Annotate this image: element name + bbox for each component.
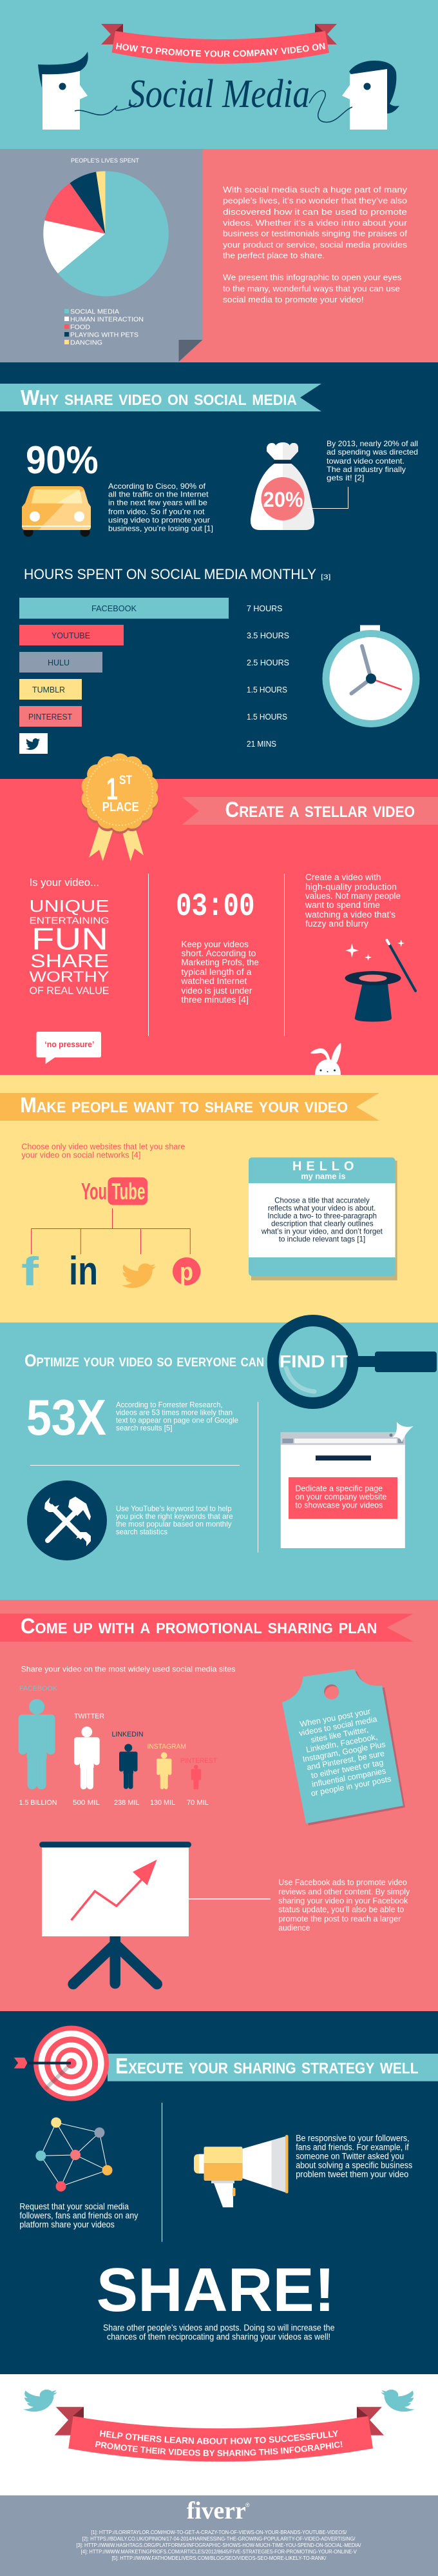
bar chart: TUMBLR: [32, 685, 65, 694]
text: production values: want to spend time: [305, 900, 380, 910]
text: Cisco: in the next few years will be: [108, 498, 207, 507]
people chart: INSTAGRAM: [147, 1743, 186, 1751]
text: Facebook ads: promote the post to reach a larger: [278, 1914, 401, 1923]
text: production values: [305, 872, 401, 929]
text: Facebook ads: [278, 1878, 410, 1932]
panel: intro text: [179, 149, 438, 362]
panel: make people want to share: [0, 1075, 438, 1322]
text: keyword tool: [116, 1504, 233, 1537]
text: Cisco: using video to promote your: [108, 515, 210, 524]
people chart: TWITTER: [74, 1713, 104, 1720]
people chart: [19, 1685, 217, 1807]
chart title: PEOPLE'S LIVES SPENT: [71, 157, 139, 164]
logo: fiverr: fiverr: [187, 2497, 246, 2524]
intro line: Share your video on the most widely used social media sites: [21, 1665, 236, 1674]
left face: [38, 52, 88, 130]
text: request shares: Request that your social media: [19, 2202, 129, 2212]
chart legend: SOCIAL MEDIA: [70, 308, 119, 316]
icon: pinterest: [173, 1257, 200, 1286]
icon: tools: [27, 1480, 107, 1560]
chart legend: [64, 308, 144, 347]
title: Social Media: [75, 72, 352, 122]
intro paragraph: people’s lives, it’s no wonder that they’ve also: [223, 196, 407, 206]
name tag: [249, 1157, 397, 1281]
stat: 90%: 90%: [26, 438, 99, 482]
text: request shares: platform share your videos: [19, 2220, 115, 2230]
hang tag: or people in your posts: [310, 1775, 392, 1798]
callout line: [307, 487, 348, 508]
hang tag: LinkedIn, Facebook,: [305, 1732, 378, 1755]
bar chart: FACEBOOK: [91, 604, 137, 613]
panel: intro chart: [0, 149, 203, 362]
bar chart: HULU: [48, 658, 70, 667]
icon: magnifying glass: FIND IT: [280, 1352, 348, 1372]
chart legend: HUMAN INTERACTION: [70, 316, 144, 324]
text: keyword tool: you pick the right keywords that are: [116, 1512, 233, 1521]
icon: target and arrow: [14, 2026, 109, 2101]
name tag: my name is: [301, 1171, 345, 1181]
intro paragraph: [223, 184, 408, 304]
text: Cisco: all the traffic on the Internet: [108, 490, 209, 499]
first place badge: [82, 753, 158, 861]
text: share others: [103, 2323, 335, 2342]
text: keep videos short: Keep your videos: [181, 939, 249, 949]
browser window: to showcase your videos: [295, 1500, 383, 1510]
panel: why share video: [0, 362, 438, 780]
name tag: reflects what your video is about.: [268, 1204, 376, 1213]
text: keep videos short: Marketing Profs, the: [181, 958, 259, 967]
header ribbon: [101, 24, 337, 64]
name tag: description that clearly outlines: [271, 1219, 374, 1228]
text: be responsive: someone on Twitter asked you: [296, 2152, 404, 2161]
panel: execute your strategy: [0, 2011, 438, 2374]
panel: footer: [0, 2495, 438, 2576]
text: Facebook ads: Use Facebook ads to promote video: [278, 1878, 407, 1887]
title: Social Media: Social Media: [128, 72, 310, 116]
text: share others: chances of them reciprocating and sharing your videos as well!: [107, 2332, 330, 2342]
first place badge: 1: [106, 772, 118, 807]
icon: birds: [23, 2390, 415, 2412]
text: be responsive: fans and friends. For example, if: [296, 2143, 409, 2152]
text stack: is your video: Is your video...: [30, 876, 99, 889]
speech bubble: ‘no pressure’: [44, 1039, 94, 1049]
text: keep videos short: typical length of a: [181, 967, 252, 977]
text: keep videos short: short. According to: [181, 949, 256, 958]
panel: create a stellar video: [0, 753, 438, 1075]
text stack: is your video: [30, 876, 110, 996]
icon: megaphone: [194, 2135, 289, 2207]
chart legend: DANCING: [70, 339, 102, 347]
closing ribbon: HELP OTHERS LEARN ABOUT HOW TO SUCCESSFULLY: [99, 2430, 338, 2444]
bar chart: 1.5 HOURS: [247, 713, 287, 722]
icon: money sack: 20%: [263, 487, 303, 511]
bar chart: 21 MINS: [247, 740, 276, 749]
panel: promotional sharing plan: [0, 1600, 438, 2011]
text: Forrester: search results [5]: [116, 1424, 173, 1433]
text: Cisco: According to Cisco, 90% of: [108, 482, 206, 491]
text: keep videos short: watched Internet: [180, 976, 247, 986]
icon: facebook: f: [21, 1250, 39, 1294]
hang tag: influential companies: [311, 1766, 386, 1789]
sources: [2]: HTTPS://BDAILY.CO.UK/OPINION/17-04-2014/HARNESSING-THE-GROWING-POPULARITY-OF-VIDEO-ADVERTISING/: [82, 2535, 356, 2542]
text: ad spending: By 2013, nearly 20% of all: [327, 439, 418, 448]
intro paragraph: social media to promote your video!: [223, 295, 364, 304]
text stack: is your video: ENTERTAINING: [30, 916, 110, 926]
text: request shares: followers, fans and friends on any: [19, 2211, 138, 2221]
text: Forrester: videos are 53 times more likely than: [116, 1408, 233, 1417]
text: ad spending: [327, 439, 418, 482]
bar chart: PINTEREST: [28, 713, 72, 722]
chart legend: FOOD: [70, 324, 90, 331]
intro paragraph: videos. Whether it’s a video intro about your: [223, 218, 408, 228]
sources: [4]: HTTP://WWW.MARKETINGPROFS.COM/ARTICLES/2012/8645/FIVE-STRATEGIES-FOR-PROMOTING-YOUR-ONLINE-V: [81, 2548, 357, 2555]
name tag: HELLO: [292, 1159, 354, 1174]
icon: YouTube logo: You: [81, 1178, 107, 1204]
text: be responsive: about solving a specific business: [296, 2161, 412, 2170]
browser window: [281, 1422, 414, 1548]
text: Facebook ads: reviews and other content. By simply: [278, 1887, 410, 1896]
sources: [5]: HTTP://WWW.FATHOMDELIVERS.COM/BLOG/SEO/VIDEOS-SEO-MORE-LIKELY-TO-RANK/: [112, 2555, 327, 2561]
sources: [76, 2529, 361, 2561]
bar chart: 7 HOURS: [247, 604, 282, 613]
section banner: Come up with a promotional sharing plan: [21, 1614, 377, 1638]
name tag: Include a two- to three-paragraph: [267, 1212, 377, 1221]
heading: Optimize your video so everyone can: [24, 1351, 264, 1370]
intro paragraph: With social media such a huge part of many: [223, 184, 408, 195]
text: Forrester: text to appear on page one of Google: [116, 1416, 238, 1425]
header ribbon: HOW TO PROMOTE YOUR COMPANY VIDEO ON: [116, 43, 325, 57]
icon: magnifying glass: [273, 1321, 437, 1403]
text: Forrester: [116, 1401, 238, 1433]
icon: twitter: [122, 1263, 156, 1288]
icon: YouTube logo: Tube: [112, 1178, 146, 1204]
text stack: is your video: FUN: [32, 922, 108, 957]
icon: network: [35, 2118, 112, 2192]
people chart: LINKEDIN: [112, 1731, 144, 1738]
text: ad spending: The ad industry finally: [327, 465, 406, 474]
text: be responsive: Be responsive to your followers,: [296, 2134, 410, 2143]
text: Forrester: According to Forrester Research,: [116, 1401, 223, 1410]
panel: optimize your video: [0, 1321, 438, 1600]
intro paragraph: We present this infographic to open your eyes: [223, 273, 402, 282]
share heading: SHARE!: [97, 2256, 335, 2325]
section banner: Make people want to share your video: [20, 1093, 348, 1117]
speech bubble: [36, 1032, 101, 1064]
text: keyword tool: search statistics: [116, 1528, 167, 1537]
icon: pinterest: p: [180, 1259, 193, 1286]
text: keep videos short: three minutes [4]: [181, 995, 249, 1005]
panel: call to share: [23, 2390, 415, 2462]
hang tag: and Pinterest, be sure: [306, 1749, 385, 1772]
closing ribbon: PROMOTE THEIR VIDEOS BY SHARING THIS INFOGRAPHIC!: [95, 2441, 343, 2457]
text: be responsive: [296, 2134, 412, 2179]
text: Cisco: from video. So if you’re not: [108, 507, 205, 516]
text stack: is your video: SHARE: [30, 951, 109, 972]
text: Facebook ads: status update, you’ll also be able to: [278, 1905, 404, 1914]
hang tag: Instagram, Google Plus: [302, 1740, 386, 1764]
text: Cisco: [108, 482, 213, 533]
text: ad spending: toward video content.: [327, 457, 405, 466]
text: Facebook ads: audience: [278, 1923, 310, 1932]
icon: YouTube logo: [81, 1177, 148, 1205]
bar chart: YOUTUBE: [52, 631, 90, 640]
stat: 53X: 53X: [26, 1389, 106, 1446]
chart heading: [3]: [321, 574, 331, 581]
text: keep videos short: video is just under: [181, 986, 252, 996]
hang tag: videos to social media: [298, 1715, 377, 1738]
panel: header: [0, 0, 438, 149]
text: production values: values. Not many people: [305, 891, 401, 901]
sources: [1]: HTTP://LORIRTAYLOR.COM/HOW-TO-GET-A-CRAZY-TON-OF-VIEWS-ON-YOUR-BRANDS-YOUTUBE-VIDEOS/: [91, 2529, 347, 2535]
people chart: 500 MIL: [73, 1799, 100, 1807]
people chart: 238 MIL: [114, 1799, 139, 1807]
pie chart: [43, 171, 169, 296]
text: share others: Share other people’s videos and posts. Doing so will increase the: [103, 2323, 335, 2333]
icon: clock: [322, 625, 420, 727]
section banner: Why share video on social media: [21, 386, 297, 409]
bar chart: 3.5 HOURS: [247, 631, 289, 640]
people chart: 1.5 BILLION: [19, 1799, 57, 1807]
closing ribbon: [54, 2406, 384, 2462]
bar chart: [19, 598, 289, 754]
text: ad spending: gets it! [2]: [327, 473, 365, 482]
first place badge: ST: [119, 774, 132, 787]
text: production values: high-quality production: [305, 882, 397, 892]
chart legend: PLAYING WITH PETS: [70, 331, 138, 339]
name tag: what’s in your video, and don’t forget: [261, 1227, 383, 1236]
first place badge: PLACE: [102, 800, 139, 814]
intro paragraph: discovered how it can be used to promote: [223, 207, 407, 217]
text stack: is your video: OF REAL VALUE: [30, 985, 110, 996]
people chart: 70 MIL: [187, 1799, 209, 1807]
text: be responsive: problem tweet them your video: [296, 2170, 408, 2179]
right face: [342, 61, 399, 130]
text: request shares: [19, 2202, 138, 2230]
name tag: Choose a title that accurately: [274, 1196, 370, 1205]
text: production values: watching a video that’s: [305, 910, 395, 919]
people chart: PINTEREST: [180, 1757, 217, 1765]
chart heading: HOURS SPENT ON SOCIAL MEDIA MONTHLY: [24, 566, 316, 582]
people chart: FACEBOOK: [19, 1685, 58, 1693]
text: ad spending: ad spending was directed: [327, 447, 418, 457]
icon: magic hat: [345, 939, 415, 1021]
icon: money sack: [251, 442, 314, 530]
bar chart: 2.5 HOURS: [247, 658, 289, 667]
timer: 03:00: [176, 889, 255, 925]
icon: linkedin: in: [69, 1249, 98, 1293]
text stack: is your video: WORTHY: [30, 968, 110, 985]
intro paragraph: the perfect place to share.: [223, 251, 325, 261]
section banner: Create a stellar video: [225, 798, 415, 822]
icon: car: [22, 486, 91, 536]
people chart: 130 MIL: [150, 1799, 175, 1807]
bar chart: 1.5 HOURS: [247, 685, 287, 694]
text: choose websites: Choose only video websites that let you share: [21, 1142, 185, 1151]
sources: [3]: HTTP://WWW.HASHTAGS.ORG/PLATFORMS/INFOGRAPHIC-SHOWS-HOW-MUCH-TIME-YOU-SPEND-ON-SOCIAL-MEDIA/: [76, 2542, 361, 2548]
hang tag: When you post your: [299, 1707, 371, 1729]
presentation board: [39, 1842, 191, 1984]
text: keep videos short: [180, 939, 259, 1005]
text: keyword tool: Use YouTube’s keyword tool to help: [116, 1504, 232, 1513]
intro paragraph: to the many, wonderful ways that you can use: [223, 284, 400, 293]
text: Cisco: business, you’re losing out [1]: [108, 524, 213, 533]
text: choose websites: your video on social networks [4]: [21, 1150, 140, 1159]
text: choose websites: [21, 1142, 185, 1159]
hang tag: to either tweet or tag: [310, 1758, 384, 1780]
logo: fiverr: ®: [245, 2502, 250, 2508]
hang tag: [282, 1669, 405, 1825]
text: keyword tool: the most popular based on monthly: [116, 1520, 232, 1529]
browser window: on your company website: [295, 1492, 386, 1502]
browser window: Dedicate a specific page: [295, 1484, 383, 1493]
text: production values: fuzzy and blurry: [305, 919, 368, 929]
text: Facebook ads: sharing your video in your Facebook: [278, 1896, 408, 1905]
intro paragraph: business or testimonials singing the praises of: [223, 229, 407, 239]
text stack: is your video: UNIQUE: [30, 898, 110, 916]
intro paragraph: your product or service, social media provides: [223, 240, 408, 250]
name tag: to include relevant tags [1]: [279, 1235, 365, 1244]
icon: rabbit: [310, 1043, 341, 1075]
hang tag: sites like Twitter,: [310, 1725, 369, 1745]
text: production values: Create a video with: [305, 872, 381, 882]
